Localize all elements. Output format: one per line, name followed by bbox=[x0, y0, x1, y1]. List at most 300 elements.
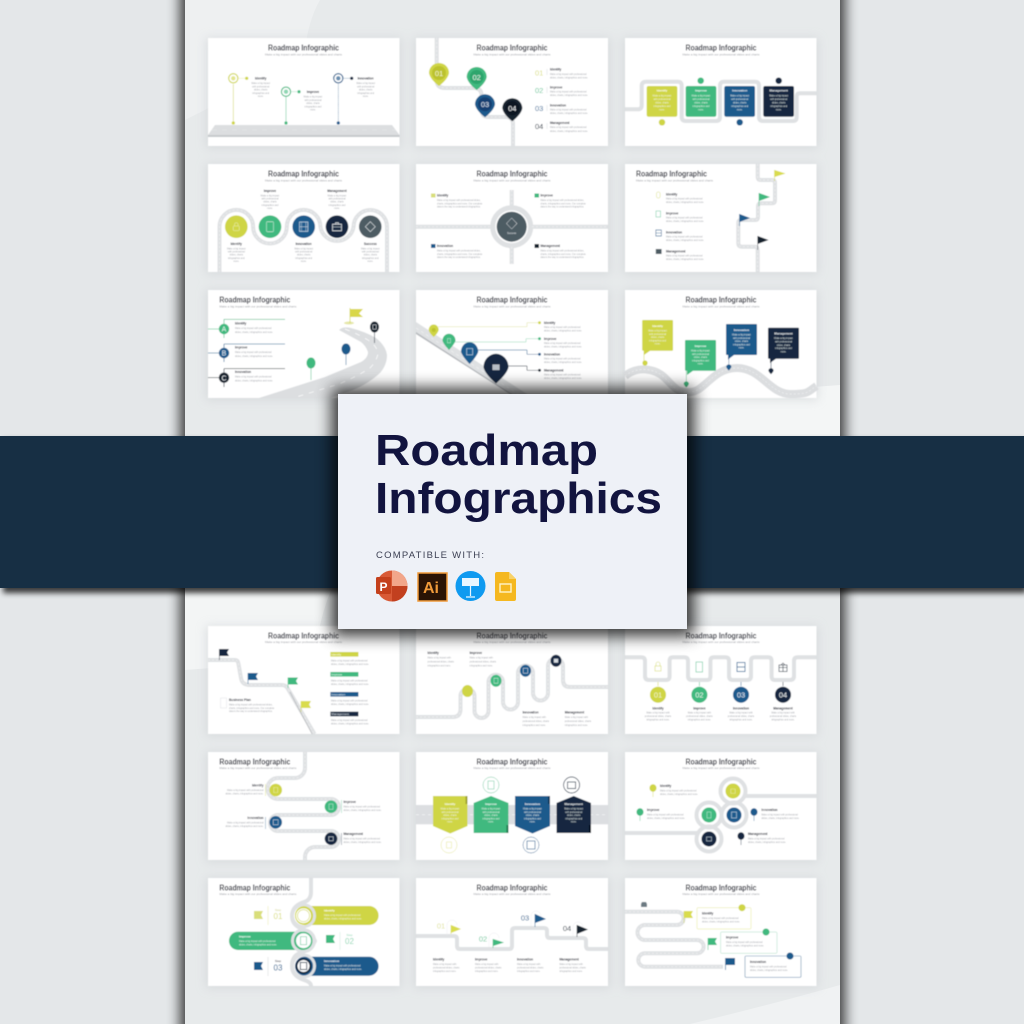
slide 2: numbered pins bbox=[416, 38, 608, 146]
text A: Make a big impact with professional bbox=[235, 327, 272, 330]
center circle: Success bbox=[507, 232, 517, 235]
marker 03 bbox=[521, 911, 546, 927]
callout 2: slides, charts bbox=[694, 356, 708, 359]
tag: innovation: Innovation bbox=[331, 692, 346, 696]
label 3: with professional bbox=[357, 85, 375, 88]
card: innovation: infographics and bbox=[524, 817, 542, 820]
subtitle: Make a big impact with our professional slides and charts bbox=[265, 53, 343, 56]
pill 1: Identify bbox=[324, 908, 335, 912]
step 01: 01 bbox=[274, 912, 283, 921]
label: innovation: Make a big impact with bbox=[523, 716, 547, 719]
main heading: Infographics bbox=[375, 474, 662, 523]
label: identify: Make a big impact with bbox=[428, 656, 452, 659]
item: identify bbox=[431, 194, 483, 209]
callout 3 bbox=[726, 324, 757, 370]
list item 04: Management bbox=[550, 121, 570, 125]
step 01: infographics and more. bbox=[646, 718, 670, 722]
tag: management: Management bbox=[331, 712, 349, 716]
label 1: Identify bbox=[255, 76, 267, 80]
label: identify: Identify bbox=[428, 651, 439, 655]
compatible label: COMPATIBLE WITH: bbox=[376, 550, 484, 561]
label 1 bbox=[251, 76, 270, 98]
business plan text: Make a big impact with professional slides, bbox=[229, 704, 273, 706]
box 4: more. bbox=[776, 108, 782, 112]
pill 3: Make a big impact with professional bbox=[324, 964, 361, 968]
slide 13: serpentine road bbox=[208, 752, 400, 860]
step 02 bbox=[326, 932, 354, 950]
callout 1: more. bbox=[655, 343, 661, 346]
road bbox=[259, 327, 387, 398]
callout 4 bbox=[768, 328, 799, 374]
text B: slides, charts, infographics and more. bbox=[235, 355, 273, 358]
label: improve bbox=[475, 958, 502, 973]
title: Roadmap Infographic bbox=[686, 44, 757, 52]
callout 4: with professional bbox=[775, 340, 793, 344]
item: management bbox=[534, 244, 587, 259]
icon: Keynote bbox=[456, 571, 486, 601]
label: management: infographics and more. bbox=[565, 724, 588, 727]
flag: lime bbox=[774, 170, 786, 181]
road bbox=[625, 912, 723, 967]
box 1: infographics and bbox=[654, 105, 671, 108]
business plan text: charts, infographics and more. Our complete bbox=[229, 707, 275, 710]
label: identify bbox=[225, 784, 266, 796]
flag: blue bbox=[248, 673, 258, 684]
box 2: with professional bbox=[692, 98, 710, 101]
label 3 bbox=[356, 76, 375, 98]
road bbox=[416, 928, 608, 949]
item: innovation: charts, infographics and more. Our complete bbox=[437, 253, 483, 256]
list item 01: slides, charts, infographics and more. bbox=[550, 76, 588, 80]
road bbox=[220, 210, 387, 272]
label: improve: Make a big impact with professional bbox=[647, 814, 684, 816]
subtitle: Make a big impact with our professional slides and charts bbox=[682, 53, 760, 56]
pin 2 bbox=[281, 87, 301, 125]
card: management bbox=[556, 796, 591, 833]
slide 9: wave road with callouts bbox=[625, 290, 816, 398]
circle: success bbox=[359, 215, 382, 238]
leader lines bbox=[438, 323, 539, 370]
node: management bbox=[702, 832, 716, 846]
box 2 bbox=[686, 86, 716, 117]
pill 2: Improve bbox=[239, 934, 251, 938]
list item 03: 03 bbox=[535, 104, 543, 113]
slide 8: diagonal road bbox=[416, 290, 608, 398]
pin 01: 01 bbox=[435, 69, 443, 78]
label: innovation: Innovation bbox=[523, 710, 539, 714]
tag: improve: Improve bbox=[331, 672, 343, 676]
label: identify: more. bbox=[233, 260, 240, 263]
box 4 bbox=[763, 86, 794, 117]
label 3: slides, charts bbox=[359, 89, 373, 92]
item: management: slides, charts, infographics and more. bbox=[666, 258, 704, 261]
box 4: slides, charts bbox=[772, 102, 786, 104]
label 2: with professional bbox=[304, 99, 322, 102]
tag: innovation: Make a big impact with professional bbox=[331, 700, 368, 702]
road bbox=[437, 38, 513, 146]
sheet background bbox=[185, 0, 840, 1024]
card: improve: with professional bbox=[482, 811, 500, 814]
list item 03: slides, charts, infographics and more. bbox=[550, 112, 588, 115]
box 1: more. bbox=[659, 108, 665, 112]
item: management: Management bbox=[544, 368, 564, 372]
label: innovation bbox=[750, 808, 800, 821]
pin 04 bbox=[502, 98, 522, 121]
box 2: Make a big impact bbox=[692, 94, 711, 98]
pin 1 bbox=[229, 74, 248, 125]
item: identify bbox=[538, 321, 582, 332]
box 4: with professional bbox=[770, 98, 788, 101]
label: innovation: slides, charts, infographics and more. bbox=[225, 825, 264, 828]
item: innovation: data is the way to understand infographics. bbox=[437, 256, 481, 259]
pins bbox=[462, 655, 562, 697]
tag: improve: Make a big impact with professional bbox=[331, 680, 368, 682]
subtitle: Make a big impact with our professional slides and charts bbox=[219, 893, 297, 896]
item: identify: slides, charts, infographics and more. bbox=[666, 201, 704, 204]
label: identify: Make a big impact bbox=[227, 247, 246, 250]
list item 02: 02 bbox=[535, 86, 543, 95]
card: management: Management bbox=[565, 802, 583, 806]
item: innovation: Make a big impact with professional bbox=[666, 236, 703, 238]
item: management bbox=[538, 368, 582, 380]
label: innovation bbox=[517, 958, 544, 973]
box 3: more. bbox=[737, 108, 743, 112]
road bbox=[416, 805, 608, 824]
box 4: Management bbox=[770, 89, 788, 93]
step 02: infographics and more. bbox=[688, 718, 711, 722]
item: identify: Identify bbox=[544, 321, 556, 325]
slide 3: boxes on road bbox=[625, 38, 816, 146]
step 03: 03 bbox=[737, 690, 745, 700]
label: identify: infographics and bbox=[228, 257, 245, 260]
callout 2: Improve bbox=[695, 344, 707, 348]
slide 14: pentagon cards on road bbox=[416, 752, 608, 860]
subtitle: Make a big impact with our professional slides and charts bbox=[474, 893, 551, 896]
subtitle: Make a big impact with our professional slides and charts bbox=[474, 179, 551, 182]
label: identify bbox=[227, 242, 246, 263]
pin 03 bbox=[475, 94, 495, 117]
label: management: with professional bbox=[328, 198, 346, 200]
callout 4: Make a big impact bbox=[774, 337, 793, 340]
label: improve: Improve bbox=[264, 189, 276, 193]
slide 10: business plan road bbox=[208, 626, 400, 734]
label 1: infographics and bbox=[252, 92, 270, 95]
label: identify: professional slides, charts bbox=[433, 966, 460, 970]
item: innovation: Innovation bbox=[666, 230, 682, 234]
box 3: with professional bbox=[731, 98, 749, 101]
icon: phone bbox=[696, 662, 702, 672]
sheet shadow bbox=[180, 0, 845, 1024]
title: Roadmap Infographic bbox=[686, 296, 757, 305]
label: management: professional slides, charts bbox=[565, 720, 592, 723]
item: identify: Make a big impact with professional bbox=[666, 198, 703, 200]
title: Roadmap Infographic bbox=[268, 170, 339, 178]
circle: management bbox=[326, 215, 348, 238]
subtitle: Make a big impact with our professional slides and charts bbox=[682, 893, 760, 896]
card: improve: Make a big impact bbox=[482, 808, 501, 810]
text B: Make a big impact with professional bbox=[235, 351, 272, 354]
list item 02 bbox=[535, 85, 588, 97]
step 03 bbox=[728, 682, 755, 722]
tag: management bbox=[330, 712, 369, 726]
pill 1 bbox=[292, 905, 379, 927]
label: improve: professional slides, charts bbox=[470, 660, 497, 663]
label: management: Make a big impact with professional bbox=[748, 838, 785, 840]
tag: identify: Make a big impact with professional bbox=[331, 660, 368, 662]
step 01 bbox=[254, 906, 283, 925]
item: improve: Improve bbox=[544, 337, 557, 341]
label: management: Management bbox=[327, 189, 348, 193]
item: improve bbox=[538, 337, 582, 348]
callout 1: with professional bbox=[649, 333, 667, 336]
pin B bbox=[208, 344, 285, 362]
item: management: Make a big impact with professional slides, bbox=[540, 250, 584, 252]
card: identify: Make a big impact bbox=[441, 808, 460, 810]
label 2: Make a big impact bbox=[304, 96, 323, 98]
step 03: infographics and more. bbox=[729, 718, 753, 722]
step dots bbox=[659, 78, 782, 126]
title: Roadmap Infographic bbox=[219, 757, 291, 766]
pill 3 bbox=[292, 955, 379, 977]
box: improve: slides, charts, infographics and more. bbox=[726, 944, 764, 948]
circle: innovation bbox=[292, 215, 315, 238]
pin A: A bbox=[222, 327, 227, 334]
tag: improve: slides, charts, infographics and more. bbox=[331, 683, 369, 686]
road bbox=[292, 878, 315, 986]
card: identify: Identify bbox=[445, 802, 456, 806]
box 1: Make a big impact bbox=[653, 94, 672, 98]
label: identify bbox=[433, 958, 460, 973]
pill 1: Make a big impact with professional bbox=[324, 914, 361, 917]
callout 1: Identify bbox=[652, 324, 663, 328]
tag: management: Make a big impact with professional bbox=[331, 719, 368, 722]
box 3 bbox=[724, 86, 755, 117]
item: identify: charts, infographics and more. Our complete bbox=[437, 202, 483, 205]
road bbox=[268, 752, 339, 860]
subtitle: Make a big impact with our professional slides and charts bbox=[265, 179, 343, 182]
label: identify bbox=[650, 784, 698, 797]
label: identify: Make a big impact with professional bbox=[660, 790, 697, 792]
card: management: more. bbox=[571, 821, 577, 824]
title: Roadmap Infographic bbox=[476, 883, 548, 892]
item: innovation bbox=[656, 230, 704, 242]
label: innovation: Innovation bbox=[296, 242, 312, 246]
box 1: Identify bbox=[657, 89, 668, 93]
item: innovation: Make a big impact with professional slides, bbox=[437, 250, 481, 252]
item: management bbox=[656, 249, 704, 261]
pill 1: slides, charts, infographics and more. bbox=[324, 918, 362, 920]
band shadow bbox=[3, 440, 1024, 593]
card: improve: more. bbox=[488, 821, 494, 824]
label: improve: Improve bbox=[475, 958, 488, 962]
list item 01: Identify bbox=[550, 68, 562, 72]
step 01: Identify bbox=[652, 706, 664, 710]
label: management: more. bbox=[334, 207, 340, 210]
item: management: Management bbox=[540, 244, 561, 248]
pill 2 bbox=[229, 930, 314, 952]
item: innovation: slides, charts, infographics and more. bbox=[666, 239, 704, 242]
label: identify bbox=[428, 651, 455, 667]
label: management: Management bbox=[559, 958, 580, 962]
label: identify: Identify bbox=[660, 784, 672, 788]
step 03: Innovation bbox=[733, 706, 749, 710]
item: identify: slides, charts, infographics and more. bbox=[544, 330, 582, 332]
subtitle: Make a big impact with our professional slides and charts bbox=[474, 641, 551, 644]
box: identify: Make a big impact with professional bbox=[702, 917, 739, 920]
label: innovation: slides, charts, infographics and more. bbox=[761, 817, 800, 820]
flag: green bbox=[288, 678, 298, 688]
card: identify: more. bbox=[447, 821, 453, 824]
callout 1: Make a big impact bbox=[648, 330, 667, 332]
item: management: Make a big impact with professional bbox=[666, 254, 703, 258]
label: success: infographics and bbox=[362, 257, 379, 260]
text B: Improve bbox=[235, 346, 248, 350]
circle: improve bbox=[259, 215, 281, 238]
label: management: slides, charts bbox=[330, 201, 345, 204]
box 2: infographics and bbox=[693, 105, 710, 108]
title: Roadmap Infographic bbox=[476, 170, 548, 178]
callout 4: more. bbox=[781, 350, 787, 353]
slide 6: stepped road with flags bbox=[625, 164, 816, 272]
flag: navy bbox=[219, 649, 229, 660]
pin management bbox=[325, 832, 337, 845]
subtitle: Make a big impact with our professional slides and charts bbox=[474, 767, 551, 770]
label: innovation bbox=[294, 242, 313, 263]
label 3: Make a big impact bbox=[356, 82, 375, 85]
tag: management: slides, charts, infographics and more. bbox=[331, 722, 369, 726]
callout 1: slides, charts bbox=[651, 336, 665, 339]
tag: identify bbox=[330, 652, 369, 666]
label: identify: slides, charts, infographics and more. bbox=[660, 793, 698, 796]
box 3: slides, charts bbox=[733, 102, 747, 104]
roads bbox=[625, 778, 817, 852]
box 2: more. bbox=[698, 108, 704, 112]
card: management: infographics and bbox=[565, 817, 583, 820]
tag: improve bbox=[330, 672, 369, 686]
slide shadows bbox=[206, 38, 818, 988]
label: innovation: slides, charts bbox=[297, 254, 311, 257]
pin 03: 03 bbox=[481, 100, 489, 109]
center circle bbox=[497, 212, 527, 242]
box 3: infographics and bbox=[731, 105, 749, 108]
item: innovation: Make a big impact with professional bbox=[544, 358, 581, 361]
subtitle: Make a big impact with our professional slides and charts bbox=[636, 179, 714, 182]
card: improve: Improve bbox=[485, 802, 497, 806]
box: innovation bbox=[745, 952, 801, 977]
list item 01: 01 bbox=[535, 68, 543, 78]
label: management: Make a big impact with professional bbox=[344, 837, 380, 840]
label: management bbox=[342, 832, 382, 845]
flag: blue bbox=[740, 214, 750, 226]
label: innovation: infographics and more. bbox=[523, 724, 546, 727]
title: Roadmap Infographic bbox=[219, 296, 291, 305]
callout 3: slides, charts bbox=[735, 340, 749, 343]
item: innovation: Innovation bbox=[544, 352, 560, 356]
card: innovation: slides, charts bbox=[526, 814, 540, 817]
card: management: with professional bbox=[565, 811, 583, 814]
box: improve: Make a big impact with professional bbox=[726, 941, 763, 944]
label: innovation: Make a big impact with bbox=[517, 963, 541, 966]
pin A bbox=[208, 319, 285, 338]
step 04: Make a big impact with bbox=[771, 712, 795, 714]
label: success: with professional bbox=[362, 250, 379, 254]
title: Roadmap Infographic bbox=[219, 883, 291, 892]
central card shadow bbox=[332, 388, 694, 636]
subtitle: Make a big impact with our professional slides and charts bbox=[474, 306, 551, 308]
item: identify: Identify bbox=[666, 192, 678, 196]
item: identify: Identify bbox=[437, 194, 449, 198]
label 3: infographics and bbox=[357, 92, 375, 95]
pin innovation bbox=[269, 816, 282, 829]
label: identify: professional slides, charts bbox=[428, 660, 455, 663]
title: Roadmap Infographic bbox=[686, 757, 757, 766]
subtitle: Make a big impact with our professional slides and charts bbox=[682, 306, 760, 308]
road bbox=[208, 660, 314, 734]
label: management: Make a big impact with bbox=[565, 716, 589, 719]
label: innovation: infographics and more. bbox=[517, 970, 541, 973]
flag: blue bbox=[726, 958, 735, 970]
step 03: Step bbox=[275, 959, 281, 963]
marker 01 bbox=[437, 920, 461, 935]
card: innovation: more. bbox=[530, 821, 536, 824]
step 01: Step bbox=[275, 908, 281, 912]
label: improve bbox=[342, 800, 382, 813]
label 2: Improve bbox=[307, 90, 319, 94]
label: innovation bbox=[523, 710, 550, 727]
label: innovation: with professional bbox=[295, 250, 313, 254]
navy band bbox=[0, 436, 1024, 588]
card: improve bbox=[474, 796, 508, 833]
list item 03 bbox=[535, 103, 588, 115]
slide 11: zigzag road bbox=[416, 626, 608, 734]
label 3: Innovation bbox=[358, 76, 374, 80]
label: innovation: more. bbox=[301, 260, 307, 263]
text C: Make a big impact with professional bbox=[235, 376, 272, 378]
list item 01 bbox=[535, 68, 588, 80]
item: identify: data is the way to understand infographics. bbox=[437, 206, 481, 209]
pin identify bbox=[269, 784, 282, 796]
icon: Illustrator: Ai bbox=[423, 580, 439, 597]
label: improve: Make a big impact bbox=[261, 194, 280, 197]
box: identify bbox=[697, 904, 751, 929]
pin 01 bbox=[429, 63, 449, 86]
title: Roadmap Infographic bbox=[268, 44, 339, 52]
pin 1 bbox=[429, 324, 439, 337]
item: improve bbox=[656, 211, 704, 223]
subtitle: Make a big impact with our professional slides and charts bbox=[474, 53, 551, 56]
main heading: Roadmap bbox=[375, 426, 598, 475]
label: improve: Make a big impact with professional bbox=[344, 805, 380, 808]
marker 01: 01 bbox=[437, 922, 445, 930]
item: innovation: Innovation bbox=[437, 244, 453, 248]
item: identify: Make a big impact with professional slides, bbox=[437, 199, 481, 202]
slide 18: snake road with outlined boxes bbox=[625, 878, 816, 986]
subtitle: Make a big impact with our professional slides and charts bbox=[219, 767, 297, 770]
text A: Identify bbox=[235, 322, 247, 326]
step 01 bbox=[645, 682, 672, 722]
car bbox=[641, 902, 647, 907]
label: improve: professional slides, charts bbox=[475, 966, 502, 970]
flag: lime bbox=[301, 701, 311, 712]
slide 17: stepped road with numbered flags bbox=[416, 878, 608, 986]
label: improve bbox=[470, 651, 497, 667]
label: improve: Improve bbox=[647, 808, 660, 812]
slide 12: U-shaped road with numbers bbox=[625, 626, 816, 734]
box: innovation: slides, charts, infographics and more. bbox=[750, 969, 788, 972]
label: identify: Identify bbox=[231, 242, 242, 246]
label: improve: slides, charts bbox=[263, 201, 278, 204]
label: identify: infographics and more. bbox=[433, 970, 457, 973]
